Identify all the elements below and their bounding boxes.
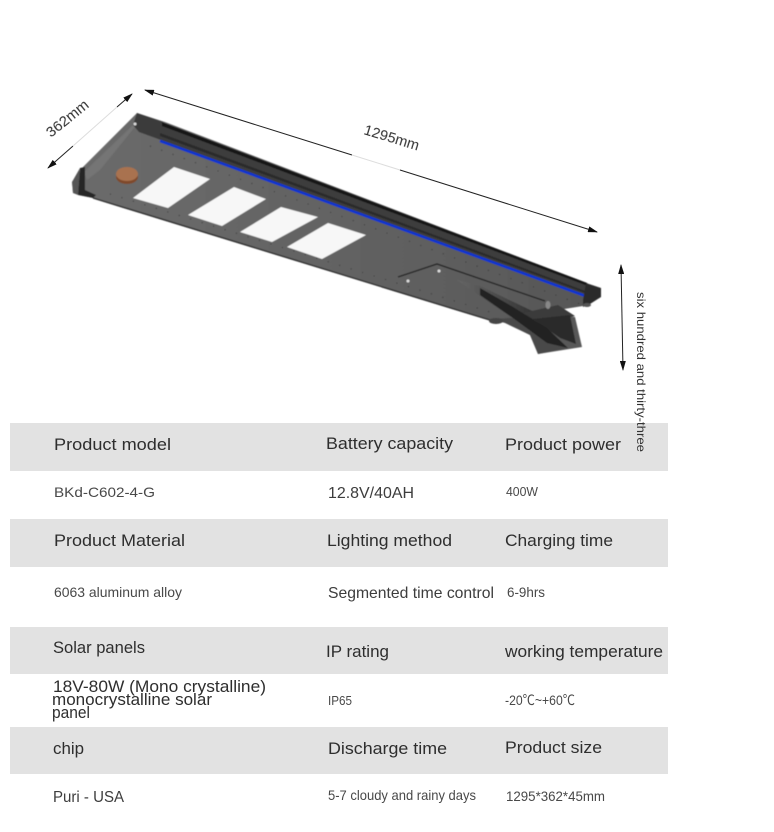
row 4 headers: Product size xyxy=(505,738,602,757)
dark top rail xyxy=(160,122,589,296)
row 1 headers xyxy=(54,434,621,454)
product illustration: solar street light xyxy=(72,113,601,354)
row 1 values xyxy=(54,484,539,502)
dimension label: 362mm: 362mm xyxy=(43,96,92,141)
LED window 3 xyxy=(240,207,318,242)
row 2 headers: Product Material xyxy=(54,531,185,550)
row 3 values: monocrystalline solar xyxy=(52,690,212,709)
row 2 headers: Charging time xyxy=(505,531,613,550)
row 3 headers: working temperature xyxy=(504,642,663,661)
row 4 values: 1295*362*45mm xyxy=(506,788,605,804)
row 4 values: Puri - USA xyxy=(53,789,124,806)
LED window 2 xyxy=(188,187,266,226)
row 4 headers: chip xyxy=(53,739,84,758)
row 2 values: Segmented time control xyxy=(328,585,494,602)
rivet rows xyxy=(150,146,580,304)
LED window 1 xyxy=(133,167,210,208)
lamp body underside xyxy=(72,113,587,321)
LED window 4 xyxy=(287,223,366,259)
right end cap xyxy=(583,283,601,307)
row 3 headers: IP rating xyxy=(326,642,389,661)
row 1 values: 12.8V/40AH xyxy=(328,485,414,502)
dimension label: height: six hundred and thirty-three xyxy=(634,292,648,452)
row 4 values: 5-7 cloudy and rainy days xyxy=(328,787,476,803)
row 1 headers: Product power xyxy=(505,435,621,454)
blue light strip xyxy=(160,141,588,297)
row 3 values: panel xyxy=(52,703,90,722)
dimension arrow: length xyxy=(145,90,597,232)
dimension arrow: height xyxy=(621,265,623,370)
left end cap xyxy=(72,113,163,198)
row 2 values: 6063 aluminum alloy xyxy=(54,584,182,600)
row 1 headers: Battery capacity xyxy=(326,434,454,453)
specification table bands xyxy=(10,423,668,774)
row 4 values xyxy=(53,787,605,806)
row 1 values: 400W xyxy=(506,484,539,499)
row 2 headers xyxy=(54,531,613,550)
row 2 values xyxy=(54,584,545,602)
row 2 headers: Lighting method xyxy=(327,531,452,550)
row 4 headers xyxy=(53,738,602,758)
row 3 headers: Solar panels xyxy=(53,638,145,657)
dimension label: 1295mm: 1295mm xyxy=(362,122,421,154)
row 3 values: 18V-80W (Mono crystalline) xyxy=(53,677,266,696)
row 3 values: -20℃~+60℃ xyxy=(505,692,575,708)
lower body edge xyxy=(93,198,493,321)
photocell sensor xyxy=(116,167,138,184)
row 3 values xyxy=(52,677,575,722)
row 3 headers xyxy=(53,638,663,661)
row 4 headers: Discharge time xyxy=(328,739,447,758)
row 1 headers: Product model xyxy=(54,435,171,454)
mounting bracket xyxy=(398,264,591,354)
row 2 values: 6-9hrs xyxy=(507,584,545,600)
row 3 values: IP65 xyxy=(328,693,352,708)
row 1 values: BKd-C602-4-G xyxy=(54,484,155,500)
dimension arrow: width xyxy=(48,94,132,168)
